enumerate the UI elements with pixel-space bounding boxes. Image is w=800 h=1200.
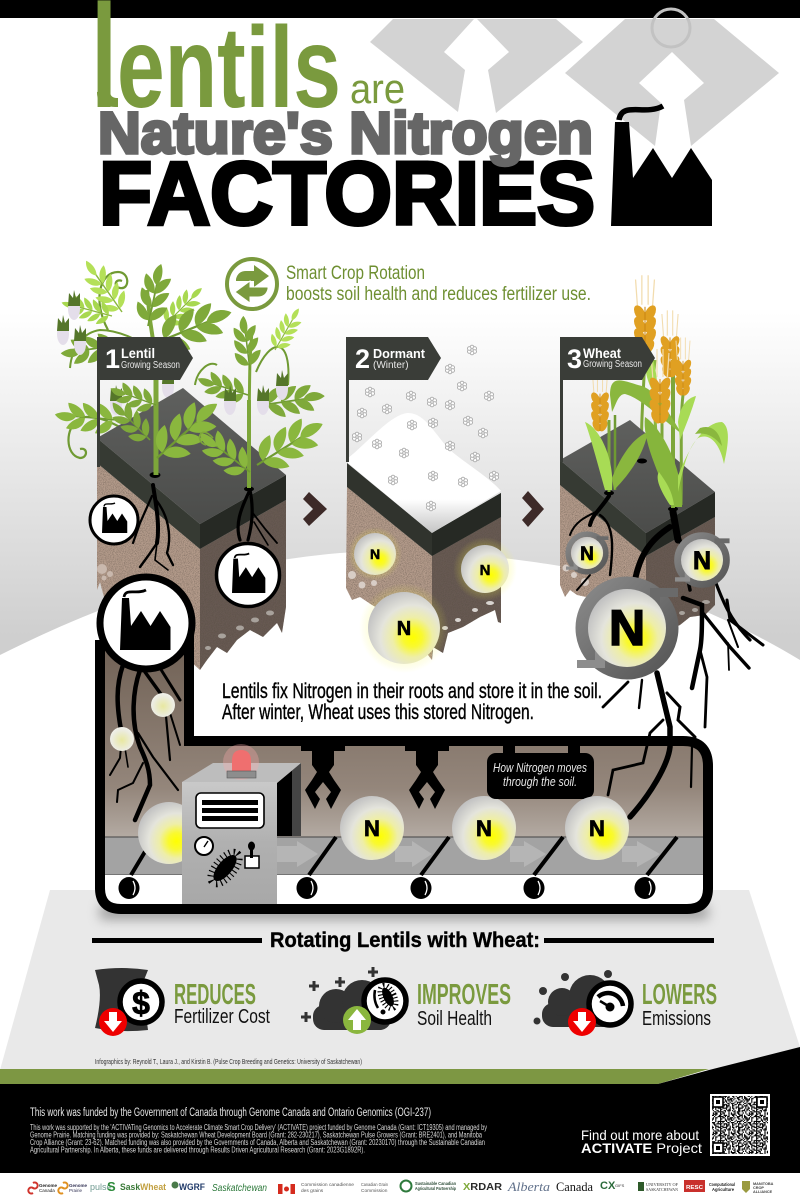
soil block 1 [97, 388, 286, 670]
logo: University of Saskatchewan [638, 1182, 679, 1192]
logo: Commission [301, 1182, 354, 1194]
machine screen [196, 793, 264, 828]
logo: University of Saskatchewan: UNIVERSITY OF [646, 1182, 678, 1187]
sign: 2 Dormant: (Winter) [373, 360, 409, 371]
funding details [30, 1123, 487, 1154]
icon: small factory circle [90, 496, 138, 544]
soil block 2 [346, 413, 501, 660]
wheat roots in soil [570, 496, 690, 590]
nitrogen sphere large: N [397, 618, 411, 640]
benefit: improves soil health [301, 967, 511, 1034]
logo: Commission: des grains [301, 1188, 324, 1194]
logo: Grain Commission: Commission [361, 1188, 388, 1194]
benefit: reduces fertilizer cost: Fertilizer Cost [174, 1006, 270, 1028]
benefit: lowers emissions: Emissions [642, 1008, 711, 1030]
logo: SCAP: Sustainable Canadian [415, 1181, 456, 1186]
nitrogen cycling ring small [566, 534, 608, 572]
logo: CX: CX [600, 1180, 616, 1192]
title: FACTORIES: FACTORIES [99, 143, 595, 243]
icon: large factory circle [100, 577, 192, 669]
nitrogen sphere large [359, 583, 449, 673]
logo: Genome Canada [28, 1183, 58, 1194]
arrow: chevron 2 [522, 491, 544, 527]
find out more [581, 1127, 702, 1156]
heading: rotating lentils with wheat: Rotating Lentils with Wheat: [270, 929, 540, 952]
sign: 1 Lentil: Growing Season [121, 360, 180, 371]
machine [182, 744, 301, 904]
logo: Genome Canada: Canada [39, 1188, 55, 1193]
rotation message [227, 259, 591, 309]
conveyor nitrogen sphere 2: N [476, 816, 492, 841]
top black bar [0, 0, 800, 18]
nitrogen sphere small [348, 527, 402, 581]
benefit: improves soil health: Soil Health [417, 1008, 492, 1030]
conveyor belt [105, 837, 703, 904]
soil block 3 [560, 420, 715, 640]
wheat stems behind [632, 275, 658, 470]
sign: 2 Dormant [346, 337, 441, 462]
conveyor frame [100, 630, 708, 919]
logo: Genome Prairie: Prairie [69, 1188, 83, 1193]
logo: WGRF [172, 1182, 205, 1193]
logo: Pulse: S [107, 1179, 116, 1194]
logo: Manitoba Crop Alliance [742, 1181, 774, 1194]
logo: Manitoba Crop Alliance: CROP [753, 1186, 764, 1190]
title: Nature's Nitrogen: Nature's Nitrogen [98, 101, 593, 166]
title [91, 0, 595, 243]
logo: Manitoba Crop Alliance: MANITOBA [753, 1182, 774, 1186]
roots of lentil plants [133, 485, 277, 570]
icon: soil with microbe [301, 967, 406, 1034]
nitrogen cycling ring large [577, 583, 678, 673]
green footer band [0, 1069, 709, 1084]
main explanation text: Lentils fix Nitrogen in their roots and store it in the soil. [222, 680, 602, 703]
sign: 2 Dormant: Dormant [373, 347, 426, 361]
sign: 3 Wheat: 3 [567, 344, 582, 374]
logo: Grain Commission: Canadian Grain [361, 1182, 388, 1188]
title: are: are [350, 65, 405, 112]
wheat lower roots [603, 575, 763, 817]
logo: RESC: RESC [686, 1185, 703, 1191]
funding heading: This work was funded by the Government of Canada through Genome Canada and Ontario Genomics (OGI-237) [30, 1107, 431, 1119]
icon: fertilizer bag with coin: $ [132, 985, 150, 1021]
funding details: Genome Prairie. Matching funding was provided by: Saskatchewan Wheat Development Board (Grant: 282-230217), Saskatchewan Pulse Growers (Grant: BRE2401), and Manitoba [30, 1130, 482, 1140]
logo: Alberta: Alberta [507, 1179, 551, 1194]
icon: fertilizer bag with coin [95, 968, 162, 1036]
conveyor nitrogen sphere 3: N [589, 816, 605, 841]
sign: 3 Wheat: Wheat [583, 345, 621, 361]
callout: how nitrogen moves: How Nitrogen moves [493, 760, 587, 775]
logo: WGRF: WGRF [179, 1182, 205, 1193]
sign: 1 Lentil: Lentil [121, 345, 155, 361]
roots in conveyor (lentil side) [110, 665, 180, 820]
logo: Pulse: pulse [90, 1182, 112, 1192]
conveyor nitrogen sphere 3 [565, 796, 629, 860]
icon: rotation arrows [227, 259, 277, 309]
nitrogen cycling ring small: N [580, 544, 594, 565]
rollers [118, 877, 656, 899]
logo: CX [600, 1180, 625, 1192]
QR code [710, 1094, 770, 1156]
sign: 3 Wheat: Growing Season [583, 359, 642, 370]
benefit: lowers emissions: LOWERS [642, 979, 717, 1011]
red warning light [223, 744, 259, 780]
sign: 2 Dormant: 2 [355, 344, 370, 374]
logo: Canada wordmark: Canada [556, 1179, 593, 1194]
main explanation text: After winter, Wheat uses this stored Nitrogen. [222, 701, 534, 724]
nitrogen cycling ring medium: N [693, 547, 711, 575]
snowflakes [352, 345, 498, 511]
wheat plants [585, 310, 728, 508]
panel: 1 lentil growing season [53, 252, 334, 670]
callout: how nitrogen moves: through the soil. [503, 774, 577, 789]
logo: SCAP: Agricultural Partnership [415, 1186, 456, 1191]
black footer [0, 1047, 800, 1173]
benefit: reduces fertilizer cost: REDUCES [174, 979, 256, 1011]
panel: 3 wheat growing season [560, 275, 728, 640]
foliage over block [101, 365, 334, 488]
sign: 1 Lentil: 1 [105, 344, 120, 374]
rotation text: boosts soil health and reduces fertilizer use. [286, 284, 591, 305]
logo: Manitoba Crop Alliance: ALLIANCE [753, 1190, 773, 1194]
logo: Grain Commission [361, 1182, 388, 1194]
nitrogen sphere medium [453, 537, 517, 601]
icon: medium factory circle [216, 544, 280, 606]
lower grey stage panel [0, 890, 800, 1070]
logo: Commission: Commission canadienne [301, 1182, 354, 1188]
arrow: chevron 1 [303, 492, 327, 526]
find out more: Find out more about [581, 1127, 699, 1143]
nitrogen cycling ring medium [675, 536, 730, 584]
logo: CX: GIFS [615, 1183, 625, 1188]
nitrogen sphere medium: N [480, 562, 490, 579]
logo: Computational Agriculture: Computational [709, 1182, 735, 1187]
conveyor nitrogen sphere 1: N [364, 816, 380, 841]
conveyor nitrogen sphere 2 [452, 796, 516, 860]
bacterium [209, 850, 241, 886]
logo: Saskatchewan: Saskatchewan [212, 1183, 267, 1194]
rotation text [286, 263, 591, 305]
white logo strip [0, 1173, 800, 1200]
benefit: lowers emissions [534, 970, 717, 1036]
logo: Genome Canada: Genome [39, 1183, 58, 1188]
logo: Sask Wheat: SaskWheat [120, 1182, 166, 1192]
funding details: This work was supported by the 'ACTIVATing Genomics to Accelerate Climate Smart Crop Delivery' (ACTIVATE) project funded by Genome Canada (Grant: ICT19305) and managed by [30, 1123, 487, 1132]
sponsor logos [28, 1179, 774, 1194]
background hill [0, 551, 800, 1100]
joystick [245, 842, 259, 868]
logo: RESC [684, 1180, 705, 1192]
nitrogen beads on roots [110, 693, 175, 751]
logo: University of Saskatchewan: SASKATCHEWAN [646, 1187, 679, 1192]
benefit: reduces fertilizer cost [95, 968, 270, 1036]
funding details: Agricultural Partnership. In Alberta, these funds are delivered through Results Driven Agricultural Research (Grant: 2023G1892R). [30, 1146, 365, 1154]
heading: rotating lentils with wheat [92, 929, 714, 952]
claw 2 [405, 745, 449, 809]
title: lentils [91, 0, 341, 139]
icon: emissions cloud with gauge [534, 970, 631, 1036]
lentil foliage behind block [53, 252, 240, 475]
panel: 2 dormant winter [0, 275, 800, 1200]
nitrogen cycling ring large: N [609, 600, 645, 656]
logo: Genome Prairie [58, 1183, 88, 1194]
rotation text: Smart Crop Rotation [286, 263, 425, 284]
logo: Computational Agriculture [709, 1182, 735, 1192]
background diamond shapes [370, 9, 779, 146]
logo: Pulse [90, 1179, 116, 1194]
gauge [195, 837, 213, 855]
logo: RDAR: XRDAR [463, 1182, 503, 1193]
sign: 3 Wheat [560, 337, 655, 462]
logo: Computational Agriculture: Agriculture [712, 1187, 734, 1192]
benefit: improves soil health: IMPROVES [417, 979, 511, 1011]
sign: 1 Lentil [97, 337, 193, 467]
callout: how nitrogen moves [487, 745, 594, 799]
title: lentils: entils [117, 4, 341, 132]
lentil second plant foliage [193, 302, 327, 488]
conveyor outline [100, 630, 708, 909]
logo: Canada flag [278, 1184, 295, 1194]
find out more: ACTIVATE Project [581, 1140, 702, 1156]
icon: title factory [611, 106, 712, 226]
main explanation text [222, 680, 602, 724]
logo: Genome Prairie: Genome [69, 1183, 88, 1188]
nitrogen sphere small: N [370, 546, 380, 562]
yellow sphere behind machine [138, 802, 200, 864]
funding details: Crop Alliance (Grant: 23-62). Matched funding was also provided by the Governments of Canada, Alberta and Saskatchewan (Grant: 20230170) through the Sustainable Canadian [30, 1138, 485, 1147]
logo: SCAP [400, 1180, 456, 1192]
infographic credit: Infographics by: Reynold T., Laura J., and Kirstin B. (Pulse Crop Breeding and Genetics: University of Saskatchewan) [95, 1057, 362, 1066]
conveyor nitrogen sphere 1 [340, 796, 404, 860]
claw 1 [301, 745, 345, 809]
